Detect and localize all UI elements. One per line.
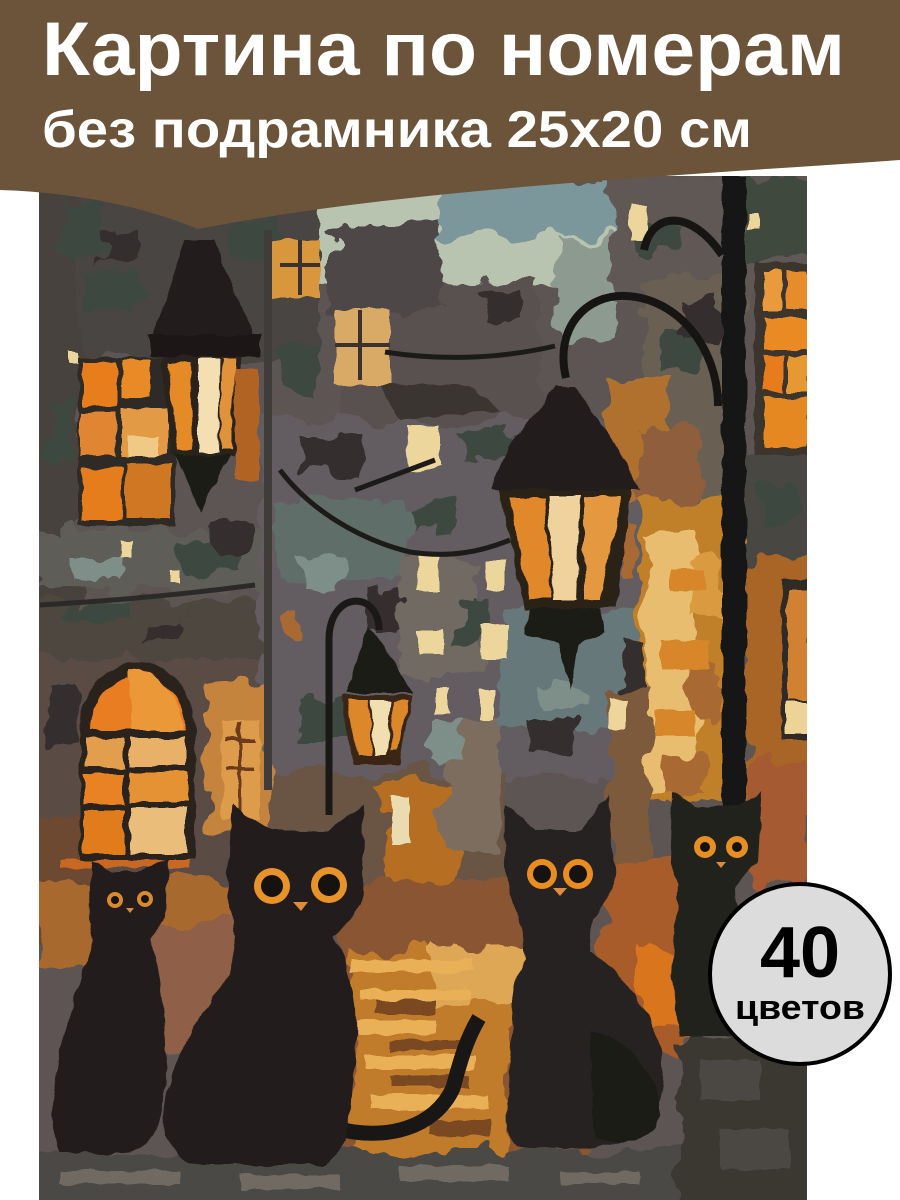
title: Картина по номерам [42,7,845,92]
patches of paint [50,200,800,790]
cat 2 large centre with tail [163,805,479,1165]
small lantern with arm [329,601,413,845]
left lantern [148,240,260,512]
lamp post with arm [563,176,746,816]
arched window [60,662,260,868]
left window [78,358,176,526]
top banner [0,0,900,229]
cat 3 right [505,793,663,1149]
centre lantern [490,385,640,690]
right window [755,262,812,740]
badge: 40 colours: цветов [735,989,865,1027]
cat 4 far right [670,792,762,1036]
badge: 40 colours [710,884,890,1064]
building details and wires [40,230,555,790]
background: walls and sky [20,170,820,1200]
painting: night street with black cats [20,170,820,1200]
badge: 40 colours: 40 [760,913,840,993]
cat 1 small left [54,858,168,1154]
subtitle: без подрамника 25х20 см [42,101,752,159]
